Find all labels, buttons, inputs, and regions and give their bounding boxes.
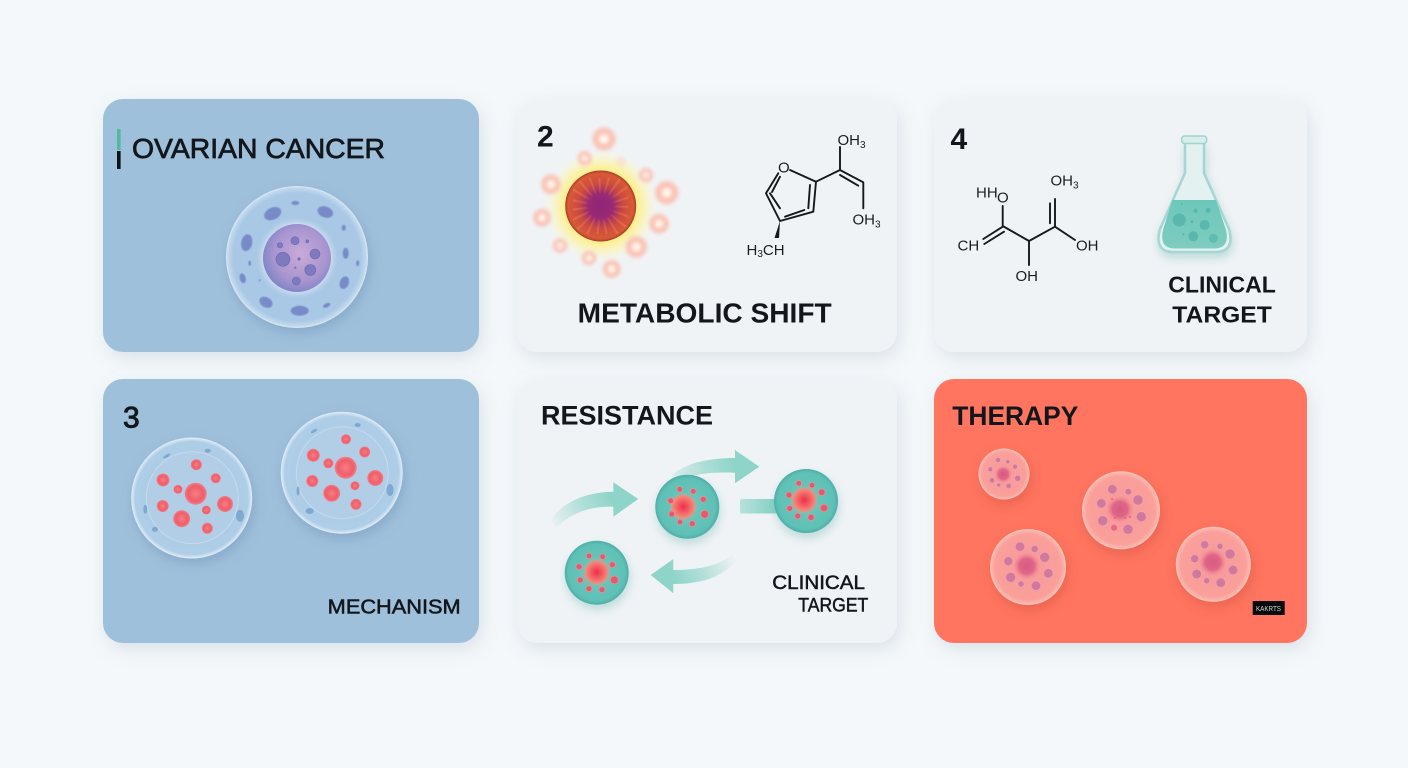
card background [103,379,479,643]
chemical structure: acid molecule: CH [958,238,979,254]
chemical structure: acid molecule: 3 [1073,181,1079,192]
step number 2: 2 [537,121,554,154]
heading: resistance: RESISTANCE [541,400,713,430]
label: clinical target: CLINICAL [772,573,865,594]
chemical structure: acid molecule: HH [976,185,998,202]
chemical structure: furan molecule: OH [852,212,875,228]
icon: metabolic cell with glow [532,126,680,279]
icon: right resistant cell [774,469,838,533]
chemical structure: acid molecule: OH [1016,268,1038,285]
card background [517,99,897,352]
card background [103,99,479,352]
panel: clinical target [934,99,1307,352]
chemical structure: furan molecule: 3 [875,220,881,230]
card background [934,99,1307,352]
icon: left cell [131,438,252,558]
card background [517,379,897,643]
panel: therapy [934,379,1307,643]
icon: small therapy cell [978,448,1030,500]
icon: right therapy cell [1176,527,1251,602]
icon: lower left therapy cell [990,529,1066,605]
chemical structure: furan molecule: O [778,160,790,176]
panel: mechanism [103,379,479,643]
panel: resistance [517,379,897,643]
icon: flask with teal liquid [1158,136,1230,252]
icon: centre therapy cell [1082,471,1160,549]
chemical structure: furan molecule: 3 [860,140,866,151]
arrow: top right [672,450,759,483]
icon: right cell [281,412,403,534]
label: clinical target [1168,272,1276,327]
panel: metabolic shift [517,99,897,352]
label: clinical target: CLINICAL [1168,272,1276,298]
step number 4: 4 [950,123,968,156]
icon: centre resistant cell [655,475,719,539]
step number 3: 3 [123,401,140,434]
connector band: right cell [740,499,778,514]
title accent bar [117,129,121,169]
chemical structure: furan molecule: H [746,242,757,259]
small black tag: KAKRTS [1256,604,1281,613]
heading: therapy: THERAPY [952,401,1078,431]
label: clinical target: TARGET [798,596,869,617]
card background [934,379,1307,643]
icon: lower resistant cell [565,541,629,605]
chemical structure: acid molecule [958,173,1098,285]
chemical structure: acid molecule: OH [1076,238,1098,254]
chemical structure: furan molecule: 3 [757,249,763,260]
label: clinical target: TARGET [1172,301,1272,327]
chemical structure: furan molecule: CH [763,242,785,259]
chemical structure: furan molecule: OH [838,132,860,149]
arrow: into centre cell [550,482,638,527]
small black tag [1253,601,1285,615]
label: mechanism: MECHANISM [328,596,461,619]
chemical structure: furan molecule [746,132,881,260]
label: metabolic shift: METABOLIC SHIFT [578,297,832,328]
arrow: back to lower cell [651,555,737,593]
chemical structure: acid molecule: OH [1050,173,1073,190]
icon: ovarian cancer cell [226,186,368,328]
chemical structure: acid molecule: O [997,190,1009,206]
heading: ovarian cancer: OVARIAN CANCER [132,133,385,164]
panel: ovarian cancer [103,99,479,352]
label: clinical target [772,573,869,617]
